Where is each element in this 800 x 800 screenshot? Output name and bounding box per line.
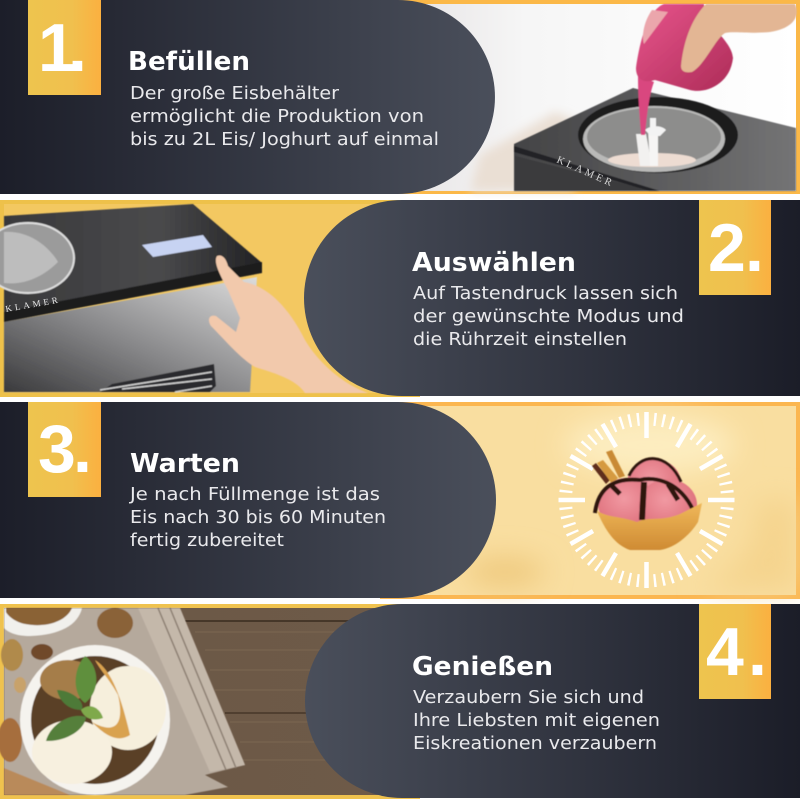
number badge 1	[28, 0, 101, 95]
body text: Auf Tastendruck lassen sich	[413, 283, 678, 304]
body text: Der große Eisbehälter	[130, 83, 340, 104]
body text	[130, 83, 439, 150]
number badge 2: 2.	[708, 210, 764, 286]
panel 3: Warten	[0, 402, 800, 599]
photo: pouring mix into the ice cream machine	[380, 0, 800, 194]
photo: bowl of walnut ice cream on napkin and wood	[0, 604, 420, 799]
dark text pill	[0, 402, 496, 598]
body text: der gewünschte Modus und	[413, 306, 684, 327]
heading: Genießen	[412, 652, 553, 682]
number badge 4: 4.	[706, 614, 767, 690]
panel 4: Genießen	[0, 604, 800, 799]
body text	[413, 283, 684, 350]
panel 2: Auswählen	[0, 200, 800, 397]
body text: Eis nach 30 bis 60 Minuten	[130, 507, 386, 528]
body text: bis zu 2L Eis/ Joghurt auf einmal	[130, 129, 439, 150]
ice cream in waffle cup	[592, 450, 702, 550]
body text	[129, 484, 386, 551]
label: KLAMER on machine: KLAMER	[5, 294, 61, 314]
heading: Befüllen	[128, 47, 250, 77]
clock ticks	[558, 412, 734, 588]
body text: die Rührzeit einstellen	[413, 329, 627, 350]
body text: Ihre Liebsten mit eigenen	[413, 710, 660, 731]
dark text pill	[304, 200, 800, 396]
number badge 3: 3.	[38, 411, 92, 487]
body text: Verzaubern Sie sich und	[413, 687, 644, 708]
body text	[413, 687, 660, 754]
photo: finger pressing machine control panel	[0, 200, 420, 397]
body text: Je nach Füllmenge ist das	[129, 484, 380, 505]
dark text pill	[0, 0, 495, 194]
number badge 3	[28, 402, 101, 497]
photo: ice cream with clock face	[380, 402, 800, 599]
heading: Auswählen	[412, 248, 576, 278]
panel 1: Befüllen	[0, 0, 800, 194]
number badge 4	[699, 604, 771, 699]
number badge 1: 1.	[38, 10, 87, 86]
dark text pill	[305, 604, 800, 798]
body text: fertig zubereitet	[130, 530, 284, 551]
number badge 2	[699, 200, 771, 295]
heading: Warten	[130, 449, 240, 479]
body text: Eiskreationen verzaubern	[413, 733, 657, 754]
body text: ermöglicht die Produktion von	[130, 106, 424, 127]
label: KLAMER on machine: KLAMER	[555, 155, 616, 190]
